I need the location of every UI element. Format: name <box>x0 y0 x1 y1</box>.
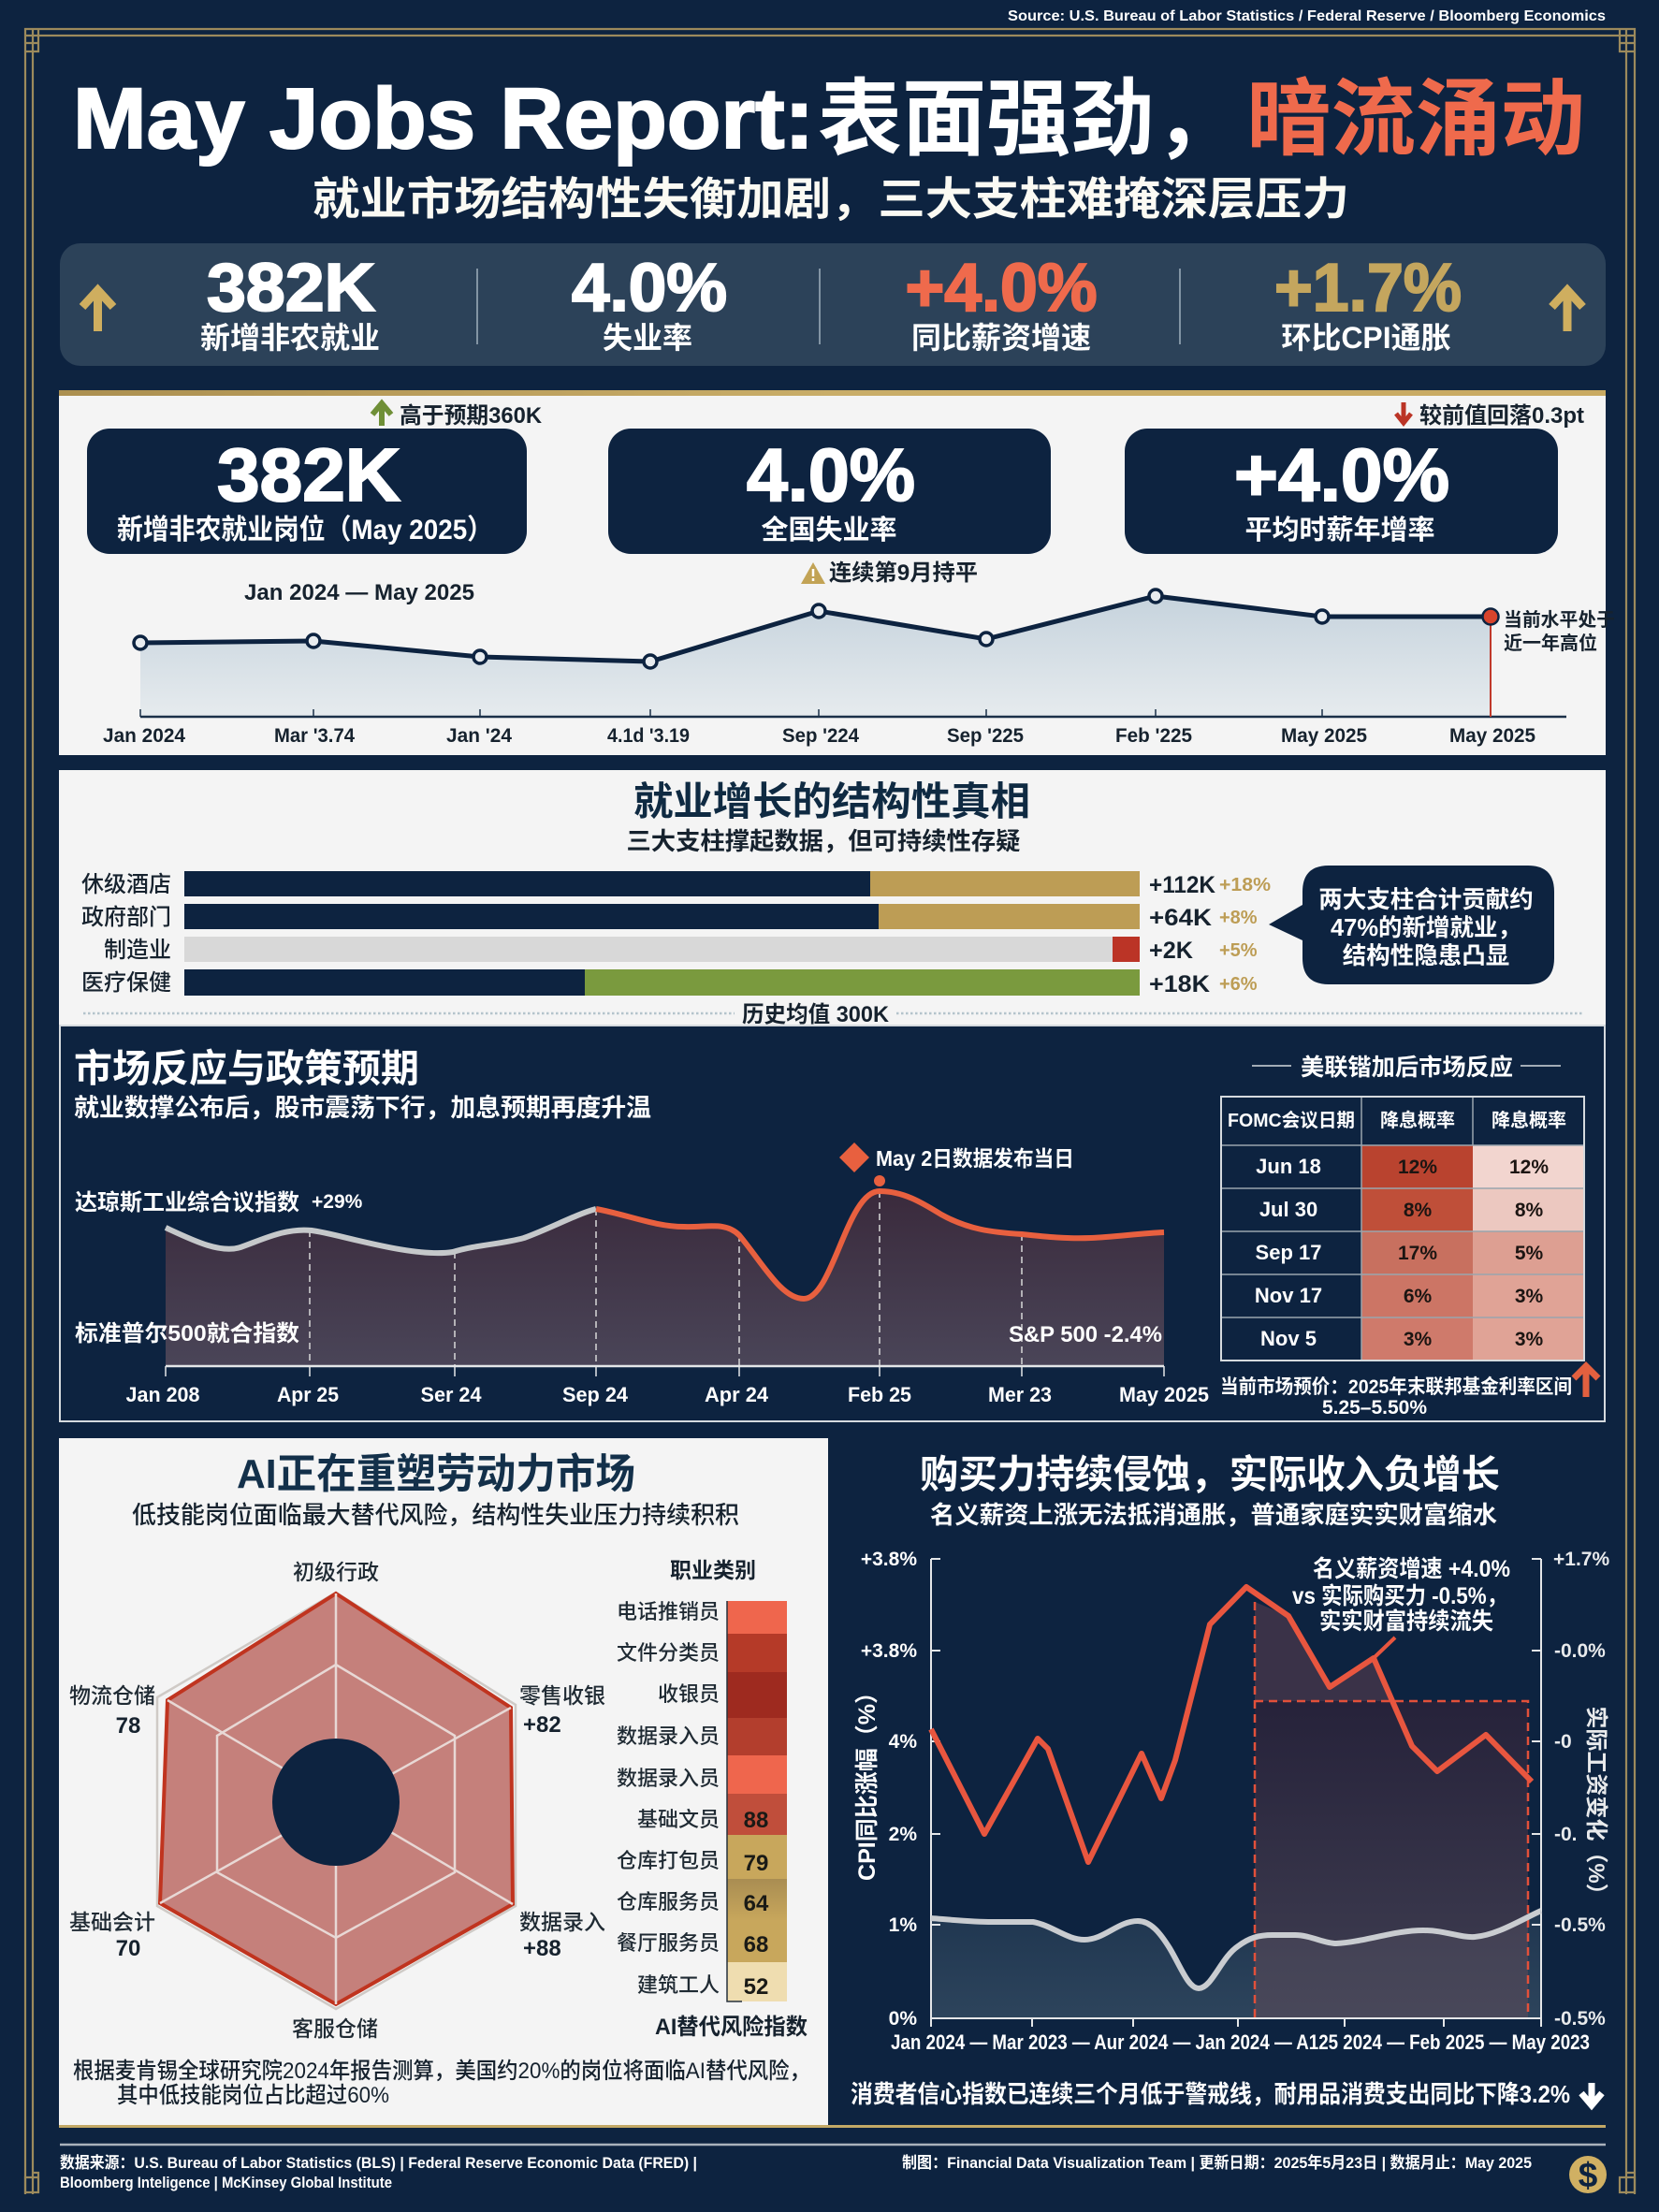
callout: real wealth loss <box>1292 1556 1510 1635</box>
card: unemployment: 4.0% <box>747 433 915 517</box>
panel: purchasing power <box>851 1453 1609 2108</box>
note: McKinsey estimate <box>73 2059 810 2108</box>
bar chart: sector contribution: +18K <box>1149 971 1210 997</box>
icon: gold up arrow left <box>82 290 113 331</box>
bar chart: sector contribution: +112K <box>1149 872 1215 898</box>
area chart: stock indices: Ser 24 <box>421 1383 482 1406</box>
line chart: CPI vs real wages: -0.5% <box>1554 1914 1606 1936</box>
area chart: stock indices: Jan 208 <box>125 1383 200 1406</box>
heading: 就业增长的结构性真相 <box>633 779 1030 823</box>
annotation: above expectations: 高于预期360K <box>400 403 543 429</box>
area chart: stock indices: May 2025 <box>1119 1383 1209 1406</box>
radar chart: 70 <box>116 1936 140 1961</box>
line chart: CPI vs real wages: +3.8% <box>861 1549 917 1570</box>
series label: Dow: +29% <box>312 1191 363 1213</box>
area chart: stock indices <box>125 1175 1209 1406</box>
card: payrolls: 新增非农就业岗位（May 2025） <box>117 514 493 546</box>
panel: structural truth <box>59 770 1606 1027</box>
legend: occupation risk scale: 文件分类员 <box>617 1641 720 1665</box>
legend: occupation risk scale: 64 <box>744 1891 769 1916</box>
radar chart: 零售收银 <box>519 1683 605 1708</box>
bar chart: sector contribution: 制造业 <box>104 938 171 963</box>
card: wage growth: 平均时薪年增率 <box>1244 515 1435 546</box>
title: May Jobs Report: <box>73 71 814 167</box>
annotation: current level: 近一年高位 <box>1504 632 1597 654</box>
callout: two pillars: 47%的新增就业， <box>1331 915 1521 941</box>
line chart: payroll trend: Mar '3.74 <box>274 725 355 747</box>
series label: S&P: 标准普尔500就合指数 <box>75 1321 299 1346</box>
line chart: payroll trend: 4.1d '3.19 <box>607 725 690 747</box>
KPI: unemployment: 失业率 <box>603 321 692 355</box>
line chart: CPI vs real wages: 实际工资变化（%） <box>1583 1706 1609 1906</box>
radar chart: 初级行政 <box>293 1560 379 1584</box>
legend: occupation risk scale: 68 <box>744 1932 768 1957</box>
line chart: CPI vs real wages: +3.8% <box>861 1640 917 1662</box>
line chart: CPI vs real wages: +1.7% <box>1553 1549 1609 1570</box>
legend: occupation risk scale: 职业类别 <box>670 1558 756 1582</box>
legend: occupation risk scale: 数据录入员 <box>617 1767 720 1790</box>
series change: S&P: S&P 500 -2.4% <box>1009 1322 1162 1347</box>
note: McKinsey estimate: 其中低技能岗位占比超过60% <box>117 2083 389 2108</box>
card: unemployment <box>608 429 1051 554</box>
table: FOMC probabilities: Nov 5 <box>1260 1327 1317 1350</box>
table: FOMC probabilities: 3% <box>1404 1329 1432 1350</box>
line chart: CPI vs real wages <box>854 1549 1609 2054</box>
panel: key numbers and trend <box>59 390 1615 755</box>
source line: Source: U.S. Bureau of Labor Statistics / Federal Reserve / Bloomberg Economics <box>1008 8 1606 24</box>
KPI: payrolls <box>200 251 380 355</box>
card: payrolls: 382K <box>217 433 400 517</box>
note: consumer confidence: 消费者信心指数已连续三个月低于警戒线，耐用品消费支出同比下降3.2% <box>851 2080 1570 2108</box>
area chart: stock indices: Apr 24 <box>705 1383 769 1406</box>
footer: data sources: 数据来源：U.S. Bureau of Labor Statistics (BLS) | Federal Reserve Economic Data (FRED) | <box>60 2154 697 2172</box>
legend: occupation risk scale: 仓库服务员 <box>617 1890 720 1914</box>
KPI: unemployment: 4.0% <box>572 251 727 326</box>
KPI: wages: 同比薪资增速 <box>911 321 1091 355</box>
radar chart: 物流仓储 <box>69 1683 155 1708</box>
line chart: payroll trend: May 2025 <box>1281 725 1367 747</box>
callout: real wealth loss: vs 实际购买力 -0.5%， <box>1292 1583 1507 1609</box>
icon: gold up arrow right <box>1551 290 1583 331</box>
legend: occupation risk scale: 88 <box>744 1808 768 1833</box>
line chart: CPI vs real wages: CPI同比涨幅（%） <box>854 1681 880 1881</box>
table: FOMC probabilities: 3% <box>1515 1329 1543 1350</box>
footer: credits: 制图：Financial Data Visualization Team | 更新日期：2025年5月23日 | 数据月止：May 2025 <box>902 2153 1532 2172</box>
table: FOMC probabilities: 3% <box>1515 1286 1543 1307</box>
legend: occupation risk scale: 79 <box>744 1851 768 1876</box>
legend: occupation risk scale: 基础文员 <box>637 1808 720 1831</box>
bar chart: sector contribution: +18% <box>1219 875 1271 895</box>
bar chart: sector contribution: +64K <box>1149 905 1212 931</box>
line chart: CPI vs real wages: 2% <box>889 1824 917 1845</box>
line chart: CPI vs real wages: -0 <box>1554 1731 1572 1753</box>
line chart: payroll trend: Feb '225 <box>1115 725 1192 747</box>
table: FOMC probabilities: 17% <box>1398 1243 1437 1264</box>
footer: data sources: Bloomberg Inteligence | McKinsey Global Institute <box>60 2174 392 2191</box>
table: FOMC probabilities: Jun 18 <box>1256 1155 1321 1178</box>
table: FOMC probabilities: 降息概率 <box>1492 1109 1566 1131</box>
callout: two pillars <box>1269 866 1554 984</box>
legend: occupation risk scale: 仓库打包员 <box>617 1849 720 1872</box>
table: FOMC probabilities: 美联锴加后市场反应 <box>1301 1054 1513 1081</box>
table: FOMC probabilities: 8% <box>1515 1200 1543 1221</box>
icon: dollar coin: $ <box>1579 2156 1598 2194</box>
title: 表面强劲， <box>818 73 1239 167</box>
radar chart: +82 <box>523 1712 561 1738</box>
KPI: payrolls: 新增非农就业 <box>200 321 380 355</box>
card: wage growth <box>1125 429 1558 554</box>
legend: occupation risk scale: AI替代风险指数 <box>655 2015 808 2040</box>
area chart: stock indices: Sep 24 <box>562 1383 629 1406</box>
callout: real wealth loss: 名义薪资增速 +4.0% <box>1313 1556 1510 1582</box>
legend: occupation risk scale: 52 <box>744 1974 768 2000</box>
chart label: period: Jan 2024 — May 2025 <box>244 580 474 605</box>
table: FOMC probabilities: Sep 17 <box>1256 1241 1321 1264</box>
line chart: CPI vs real wages: -0.0% <box>1554 1640 1606 1662</box>
KPI: payrolls: 382K <box>207 251 375 326</box>
title <box>73 71 1585 167</box>
line chart: CPI vs real wages: 0% <box>889 2008 917 2030</box>
radar chart: +88 <box>523 1936 561 1961</box>
line chart: CPI vs real wages: -0. <box>1554 1824 1578 1845</box>
table: FOMC probabilities: FOMC会议日期 <box>1228 1110 1355 1131</box>
icon: dollar coin <box>1569 2156 1607 2194</box>
callout: two pillars: 两大支柱合计贡献约 <box>1318 887 1534 913</box>
marker: release date: May 2日数据发布当日 <box>876 1146 1074 1171</box>
note: market pricing: 当前市场预价：2025年末联邦基金利率区间 <box>1220 1375 1572 1398</box>
card: payrolls <box>87 429 527 554</box>
table: FOMC probabilities: 12% <box>1398 1157 1437 1178</box>
legend: occupation risk scale: 电话推销员 <box>617 1600 720 1623</box>
bar chart: sector contribution: +5% <box>1219 940 1258 961</box>
area chart: stock indices: Mer 23 <box>988 1383 1052 1406</box>
line chart: payroll trend: Jan 2024 <box>103 725 185 747</box>
subheading: 三大支柱撑起数据，但可持续性存疑 <box>627 827 1020 855</box>
icon: white down arrow <box>1581 2083 1602 2105</box>
table: FOMC probabilities: 6% <box>1404 1286 1432 1307</box>
heading: AI正在重塑劳动力市场 <box>237 1451 635 1497</box>
line chart: payroll trend: Sep '225 <box>947 725 1024 747</box>
annotation: down from previous: 较前值回落0.3pt <box>1419 403 1584 429</box>
legend: occupation risk scale: 建筑工人 <box>637 1973 720 1997</box>
legend: occupation risk scale: 收银员 <box>658 1682 720 1706</box>
subheading: 就业数撑公布后，股市震荡下行，加息预期再度升温 <box>74 1094 651 1122</box>
heading: 购买力持续侵蚀，实际收入负增长 <box>920 1453 1500 1496</box>
radar chart: 基础会计 <box>69 1910 155 1934</box>
legend: occupation risk scale <box>617 1558 808 2040</box>
radar chart: 客服仓储 <box>292 2016 378 2041</box>
table: FOMC probabilities <box>1221 1054 1584 1361</box>
title: 暗流涌动 <box>1246 73 1585 167</box>
annotation: current level: 当前水平处于 <box>1504 609 1615 631</box>
bar chart: sector contribution: 政府部门 <box>81 905 171 930</box>
subheading: 低技能岗位面临最大替代风险，结构性失业压力持续积积 <box>132 1501 739 1529</box>
heading: 市场反应与政策预期 <box>74 1047 419 1090</box>
card: unemployment: 全国失业率 <box>761 515 897 546</box>
note: market pricing: 5.25–5.50% <box>1322 1397 1427 1419</box>
bar chart: sector contribution: 休级酒店 <box>81 872 171 897</box>
panel: market reaction <box>60 1026 1605 1421</box>
panel: headline KPI strip <box>60 243 1606 366</box>
bar chart: sector contribution: +2K <box>1149 938 1193 964</box>
bar chart: sector contribution: +6% <box>1219 974 1258 995</box>
radar chart: 78 <box>116 1713 140 1739</box>
bar chart: sector contribution: 医疗保健 <box>81 970 171 996</box>
series label: Dow: 达琼斯工业综合议指数 <box>75 1190 299 1215</box>
KPI: CPI: 环比CPI通胀 <box>1281 321 1451 355</box>
line chart: payroll trend: Jan '24 <box>446 725 512 747</box>
panel: AI reshaping labour <box>59 1438 828 2125</box>
bar chart: sector contribution <box>81 871 1271 997</box>
bar chart: sector contribution: +8% <box>1219 908 1258 928</box>
card: wage growth: +4.0% <box>1234 433 1449 517</box>
table: FOMC probabilities: Jul 30 <box>1259 1198 1317 1221</box>
subtitle: 就业市场结构性失衡加剧，三大支柱难掩深层压力 <box>313 175 1349 225</box>
KPI: CPI: +1.7% <box>1274 251 1462 326</box>
annotation: flat 9 months: 连续第9月持平 <box>829 560 978 586</box>
footer: data sources <box>60 2154 697 2191</box>
line chart: CPI vs real wages: 4% <box>889 1731 917 1753</box>
callout: real wealth loss: 实实财富持续流失 <box>1319 1608 1493 1635</box>
annotation: current level <box>1504 609 1615 654</box>
table: FOMC probabilities: Nov 17 <box>1255 1284 1322 1307</box>
area chart: stock indices: Feb 25 <box>848 1383 911 1406</box>
table: FOMC probabilities: 5% <box>1515 1243 1543 1264</box>
reference label: historical mean: 历史均值 300K <box>742 1002 890 1027</box>
KPI: wages: +4.0% <box>906 251 1097 326</box>
radar chart: 数据录入 <box>519 1910 605 1934</box>
note: McKinsey estimate: 根据麦肯锡全球研究院2024年报告测算，美国约20%的岗位将面临AI替代风险， <box>73 2059 810 2084</box>
icon: red up arrow <box>1574 1366 1598 1397</box>
table: FOMC probabilities: 12% <box>1509 1157 1549 1178</box>
legend: occupation risk scale: 餐厅服务员 <box>617 1931 720 1955</box>
line chart: payroll trend: Sep '224 <box>782 725 859 747</box>
area chart: stock indices: Apr 25 <box>277 1383 339 1406</box>
table: FOMC probabilities: 降息概率 <box>1380 1109 1455 1131</box>
radar chart <box>69 1560 605 2041</box>
line chart: payroll trend: May 2025 <box>1449 725 1535 747</box>
marker: release date <box>839 1142 1074 1172</box>
callout: two pillars: 结构性隐患凸显 <box>1343 943 1509 969</box>
line chart: CPI vs real wages: 1% <box>889 1914 917 1936</box>
line chart: CPI vs real wages: -0.5% <box>1554 2008 1606 2030</box>
legend: occupation risk scale: 数据录入员 <box>617 1724 720 1748</box>
table: FOMC probabilities: 8% <box>1404 1200 1432 1221</box>
note: market pricing <box>1220 1375 1572 1419</box>
subheading: 名义薪资上涨无法抵消通胀，普通家庭实实财富缩水 <box>930 1501 1497 1529</box>
line chart: payroll trend <box>103 589 1566 747</box>
